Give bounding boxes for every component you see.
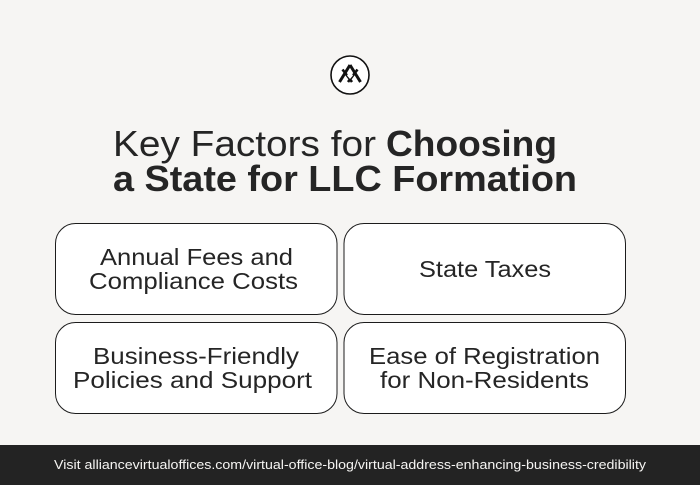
panel: business-friendly policies and support: Policies and Support — [73, 367, 313, 393]
panel: ease of registration for non-residents — [344, 322, 626, 414]
panel: business-friendly policies and support: Business-Friendly — [93, 343, 299, 369]
panel: annual fees and compliance costs: Compliance Costs — [89, 268, 298, 294]
title: a State for LLC Formation — [113, 158, 577, 199]
panel: state taxes — [344, 224, 626, 314]
panel: ease of registration for non-residents: Ease of Registration — [369, 343, 600, 369]
panel: annual fees and compliance costs: Annual Fees and — [100, 244, 293, 270]
panel: state taxes: State Taxes — [419, 256, 551, 282]
panel: ease of registration for non-residents: for Non-Residents — [380, 367, 589, 393]
footer bar — [0, 445, 700, 485]
panel: annual fees and compliance costs — [56, 224, 337, 314]
panel: business-friendly policies and support — [56, 322, 337, 414]
icon: logo badge — [331, 56, 369, 94]
title: Choosing — [386, 123, 557, 164]
title — [113, 123, 577, 199]
footer link text: Visit alliancevirtualoffices.com/virtual-office-blog/virtual-address-enhancing-business-credibility — [54, 457, 647, 472]
title: Key Factors for — [113, 123, 376, 164]
